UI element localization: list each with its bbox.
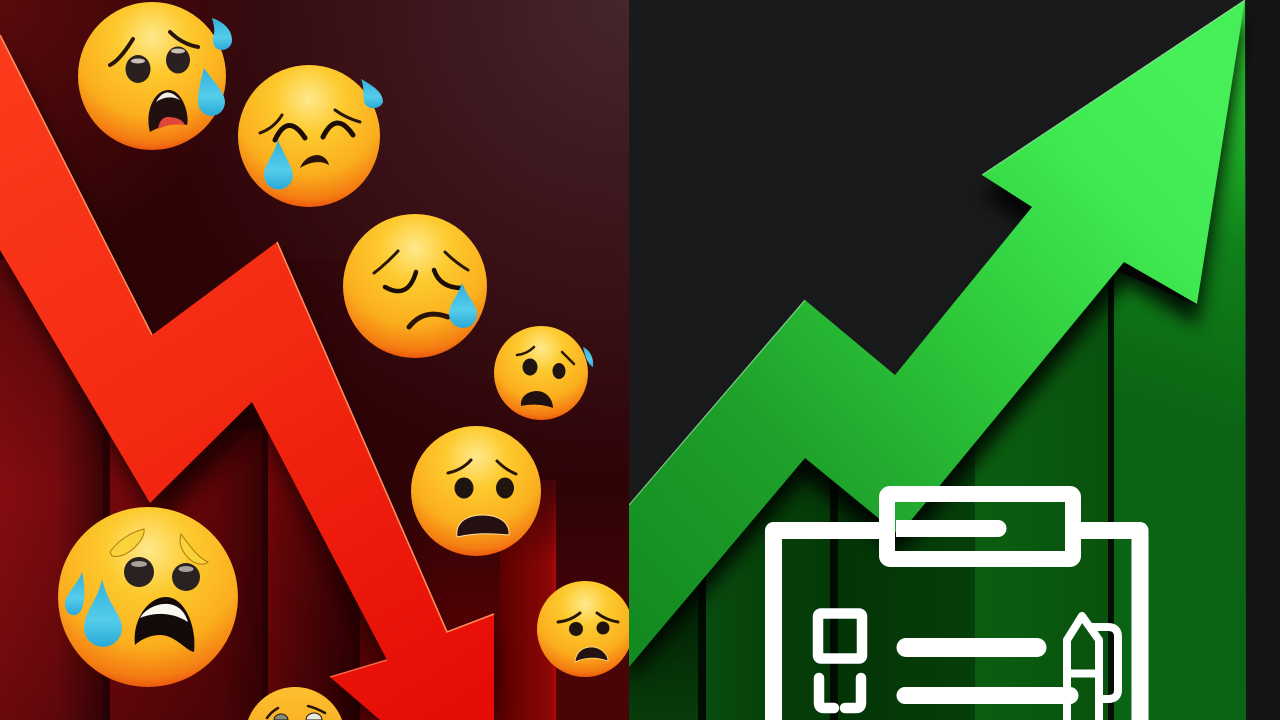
icon: emoji small frowning right (537, 581, 633, 677)
icon: white clipboard checklist (774, 494, 1140, 720)
arrow: red falling zigzag (0, 35, 494, 720)
icon: emoji crying open mouth top left (78, 2, 232, 150)
icon: emoji sad tear (343, 214, 487, 358)
icon: emoji bottom partly cropped (248, 687, 342, 720)
panel: right dark background with green columns (629, 0, 1280, 720)
icon: emoji small worried (494, 326, 593, 420)
panel: left red background (0, 0, 629, 720)
icon: emoji crying closed eyes (238, 65, 383, 207)
icon: emoji anxious large (58, 507, 238, 687)
arrow: green rising zigzag (629, 0, 1246, 680)
icon: emoji frowning open mouth (411, 426, 541, 556)
